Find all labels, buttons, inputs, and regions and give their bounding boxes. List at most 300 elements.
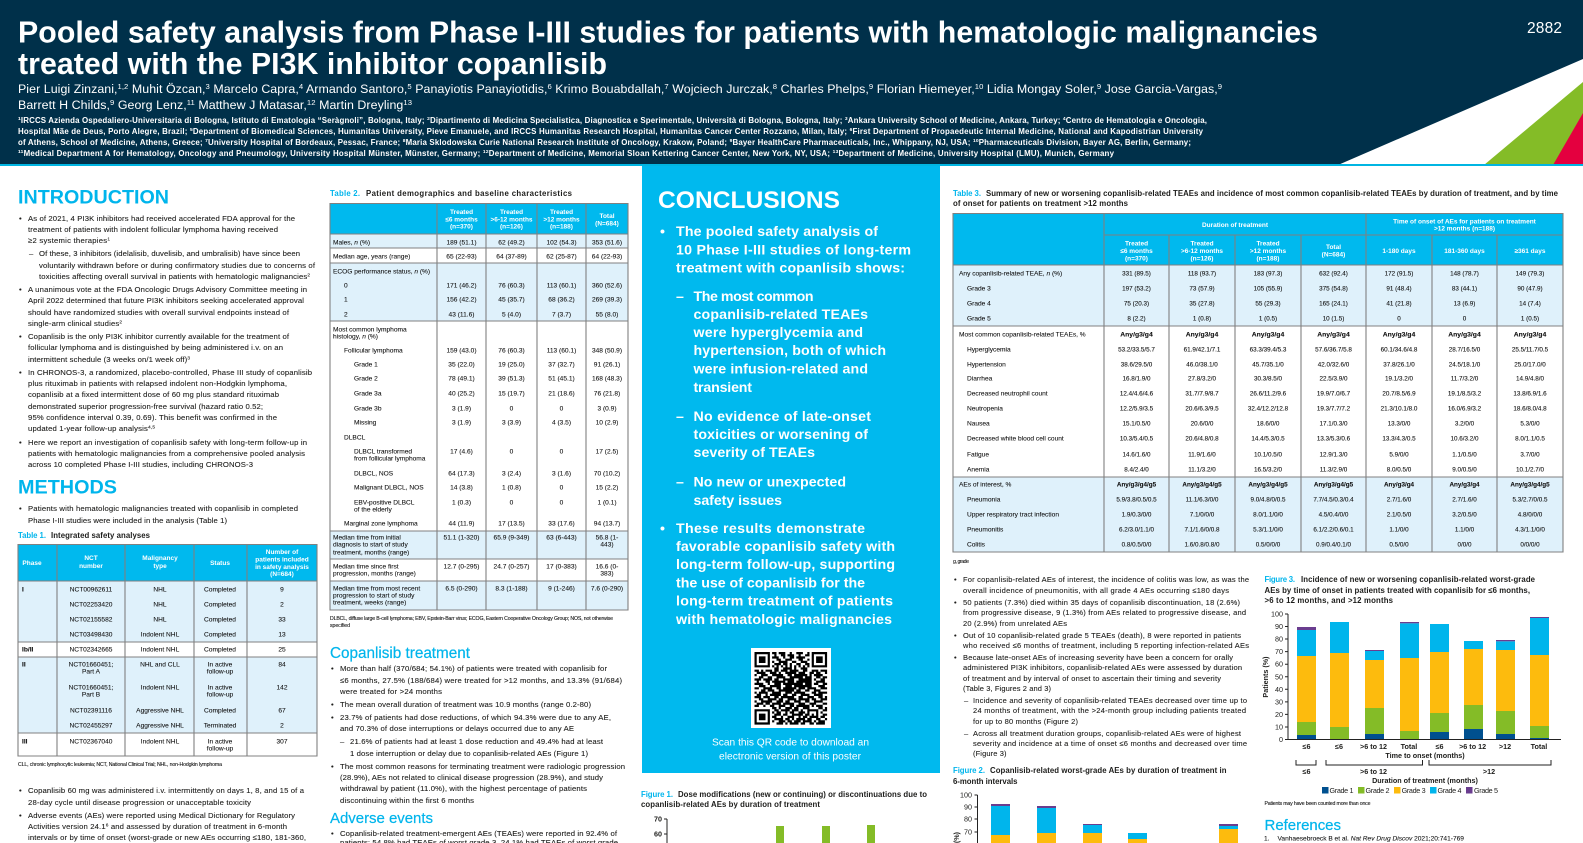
table 2 values: 62 (49.2) xyxy=(498,239,525,246)
affiliations: 11 xyxy=(18,149,24,155)
figure 3 caption xyxy=(1264,575,1536,605)
table 3 footnote: g, grade xyxy=(953,559,969,565)
table 1 body: NHL and CLL xyxy=(140,662,180,668)
x axis labels: time to onset: >12 xyxy=(1499,742,1511,751)
text: methods bullets: and assessed by duration of treatment in 6-month xyxy=(109,822,287,831)
text: QR caption: electronic version of this poster xyxy=(719,752,862,762)
y axis: 30 xyxy=(1275,697,1283,706)
table 3 values: 13.3/0/0 xyxy=(1388,420,1411,427)
table 1 body: follow-up xyxy=(207,668,234,676)
table 3 values xyxy=(1116,270,1550,548)
text: results bullets under table 3: (Figure 3) xyxy=(973,749,1007,758)
figure 2 caption: Copanlisib-related worst-grade AEs by duration of treatment in xyxy=(990,766,1227,775)
heading: references: References xyxy=(1264,817,1341,834)
table 3 header: (n=188) xyxy=(1257,256,1279,262)
table 2 values: 189 (51.1) xyxy=(446,239,477,246)
authors: Armando Santoro, xyxy=(303,82,407,96)
legend: Grade 5 xyxy=(1474,786,1498,795)
text: introduction bullets: April 2022 determined that future PI3K inhibitors seeking accelerated approval xyxy=(28,296,304,305)
table 2 values: 68 (36.2) xyxy=(548,296,575,303)
table 2 row labels: Missing xyxy=(354,419,377,426)
legend: Grade 2 xyxy=(1366,786,1390,795)
affiliations: Dipartimento di Medicina Specialistica, Diagnostica e Sperimentale, Università di Bologna, Bologna, Italy; xyxy=(430,116,845,125)
table 3 values: 10.1/0.5/0 xyxy=(1254,451,1283,458)
table 1 body: follow-up xyxy=(207,746,234,752)
text: introduction bullets: treatment of patients with indolent follicular lymphoma having received xyxy=(28,225,278,234)
table 1 body: Part A xyxy=(82,668,101,676)
authors: 9 xyxy=(1218,82,1222,91)
table 2 values: 360 (52.6) xyxy=(592,282,622,289)
table 2 values: 64 (37-89) xyxy=(496,253,527,260)
table 3 values: 1.6/0.8/0.8/0 xyxy=(1184,541,1220,548)
table 3 values: 3.2/0/0 xyxy=(1455,420,1475,427)
table 3 row labels: Any copanlisib-related TEAE, n (%) xyxy=(959,270,1062,277)
table 3 values: 7.1/1.6/0/0.8 xyxy=(1184,526,1220,533)
header band xyxy=(0,0,1583,166)
table 2 values: 56.8 (1- xyxy=(596,534,618,541)
text: results bullets under table 3: Incidence and severity of copanlisib-related TEAEs decreased over time up to xyxy=(973,696,1247,705)
table 2 values: 70 (10.2) xyxy=(594,470,620,477)
table 3 values: Any/g3/g4/g5 xyxy=(1117,481,1157,488)
affiliations: Department of Medicine, University Hospital (LMU), Munich, Germany xyxy=(839,149,1115,158)
table 3 values: 25.5/11.7/0.5 xyxy=(1512,346,1549,353)
table 3 values: 28.7/16.5/0 xyxy=(1449,346,1481,353)
table 3 values: 16.8/1.9/0 xyxy=(1122,375,1151,382)
table 3 values: 9.0/0.5/0 xyxy=(1452,466,1477,473)
table 3 values: 14.4/5.3/0.5 xyxy=(1251,435,1285,442)
table 1 caption: Table 1. xyxy=(18,531,46,540)
table 2 row labels: from follicular lymphoma xyxy=(354,455,426,462)
table 2 row labels: Median age, years (range) xyxy=(333,253,410,260)
table 1 body: 33 xyxy=(278,616,286,624)
table 1 body: In active xyxy=(208,662,233,668)
bar: treated 2 xyxy=(1037,806,1056,843)
table 2 header xyxy=(445,209,619,230)
text: conclusions bullets: the use of copanlisib for the xyxy=(676,576,865,592)
text: conclusions bullets: – xyxy=(676,409,684,425)
authors: 11 xyxy=(187,98,195,107)
figure 2 chart: 80 xyxy=(964,814,972,824)
legend: Grade 1 xyxy=(1330,786,1354,795)
table 2 values: 269 (39.3) xyxy=(592,296,622,303)
text: treatment bullets: were treated for >24 months xyxy=(339,687,442,696)
table 3 row labels: Decreased neutrophil count xyxy=(967,390,1048,397)
table 1 header: Number of xyxy=(266,549,299,556)
figure 1 caption xyxy=(641,790,927,809)
table 3 values: Any/g3/g4 xyxy=(1317,331,1350,338)
authors: 13 xyxy=(403,98,412,107)
table 2 row labels: Marginal zone lymphoma xyxy=(344,520,418,527)
table 1 header: number xyxy=(79,563,103,570)
table 1 header: patients included xyxy=(255,556,309,564)
table 3 values: 14.9/4.8/0 xyxy=(1516,375,1545,382)
x axis labels: time to onset xyxy=(1303,742,1547,760)
x axis labels: time to onset: ≤6 xyxy=(1436,742,1444,751)
figure 2 chart: 90 xyxy=(964,802,972,812)
table 3 values: 11.1/6.3/0/0 xyxy=(1186,496,1219,503)
table 3 header: >12 months xyxy=(1250,248,1287,255)
text: results bullets under table 3: administered PI3K inhibitors, copanlisib-related AEs were assessed by duration xyxy=(963,663,1242,672)
affiliations: Department of Biomedical Sciences, Humanitas University, Pieve Emanuele, and IRCCS Humanitas Research Hospital, Humanitas Cancer Center Rozzano, Milan, Italy; xyxy=(193,127,849,136)
text: results bullets under table 3: • xyxy=(954,598,957,607)
text: introduction bullets: • xyxy=(19,332,22,341)
table 3 values: 0.5/0/0/0 xyxy=(1256,541,1281,548)
table 3 header: >12 months (n=188) xyxy=(1434,226,1495,232)
text: adverse events bullets xyxy=(331,829,618,843)
table 1 body: 2 xyxy=(280,602,284,608)
table 3 values: 37.8/26.1/0 xyxy=(1383,361,1415,368)
table 2 block xyxy=(330,189,628,629)
table 3 row labels: Pneumonia xyxy=(967,496,1001,503)
text: introduction bullets: plus rituximab in patients with relapsed indolent non-Hodgkin lymphoma, xyxy=(28,379,287,388)
section: methods xyxy=(18,476,317,842)
text: conclusions bullets: long-term treatment of patients xyxy=(676,594,893,610)
table 3 values: 73 (57.9) xyxy=(1189,285,1215,292)
text: treatment bullets xyxy=(331,664,625,805)
table 2 values: 17 (0-383) xyxy=(546,563,577,570)
table 2 values: 78 (49.1) xyxy=(448,375,475,382)
table 3 row labels: Diarrhea xyxy=(967,375,993,382)
text: QR caption: Scan this QR code to download an xyxy=(712,738,869,748)
table 3 values: 7.7/4.5/0.3/0.4 xyxy=(1313,496,1354,503)
y axis: Patients (%) xyxy=(1261,656,1270,698)
table 2 values: 5 (4.0) xyxy=(502,311,521,318)
table 2 row labels: Grade 3b xyxy=(354,405,382,412)
table 2 header: (n=188) xyxy=(550,224,573,230)
table 3 header: 181-360 days xyxy=(1444,248,1485,255)
table 2 values: 17 (13.5) xyxy=(498,520,525,527)
text: introduction bullets: • xyxy=(19,214,22,223)
table 1 body: NCT02391116 xyxy=(70,708,112,714)
text: methods bullets: 28-day cycle until disease progression or unacceptable toxicity xyxy=(28,798,251,807)
text: treatment bullets: 21.6% of patients had at least 1 dose reduction and 49.4% had at least xyxy=(350,737,604,746)
table 3 values: 53.2/33.5/5.7 xyxy=(1118,346,1155,353)
table 2 values: 17 (4.6) xyxy=(450,448,473,455)
text: results bullets under table 3: overall incidence of pneumonitis, with all grade 4 AEs occurring ≤180 days xyxy=(963,586,1229,595)
table 1 body: 13 xyxy=(278,632,286,638)
table 3 values: 0/0/0/0 xyxy=(1520,541,1540,548)
table 1 body: NCT02342665 xyxy=(70,646,113,654)
text: treatment bullets: ≤6 months, 27.5% (188/684) were treated for >12 months, and 13.3% (91/684) xyxy=(340,676,622,685)
table 2 values: 12.7 (0-295) xyxy=(444,563,479,570)
table 3 row labels: Grade 5 xyxy=(967,315,991,322)
table 1 body xyxy=(69,586,288,752)
table 2 values: 168 (48.3) xyxy=(592,375,622,382)
text: methods bullets: • xyxy=(19,786,22,795)
figure 3 caption: >6 to 12 months, and >12 months xyxy=(1264,596,1394,605)
table 3 values: 12.2/5.9/3.5 xyxy=(1120,405,1154,412)
table 1 body: 2 xyxy=(280,722,284,730)
affiliations: Medical Department A for Hematology, Oncology and Pneumology, University Hospital Münster, Münster, Germany; xyxy=(24,149,483,158)
table 2 header: >12 months xyxy=(543,216,580,224)
table 3 values: 57.6/36.7/5.8 xyxy=(1315,346,1352,353)
table 3 values: 183 (97.3) xyxy=(1254,270,1282,277)
authors: 3 xyxy=(206,82,210,91)
table 3 row labels: Decreased white blood cell count xyxy=(967,435,1064,442)
table 3 values: 19.1/8.5/3.2 xyxy=(1448,390,1482,397)
text: introduction bullets: 3 xyxy=(187,356,190,362)
figure 1 chart: 70 xyxy=(654,814,662,824)
table 3 values: 19.9/7.0/6.7 xyxy=(1317,390,1351,397)
text: treatment bullets: The most common reasons for terminating treatment were radiologic progression xyxy=(340,762,625,771)
authors: 4 xyxy=(299,82,304,91)
heading: adverse events: Adverse events xyxy=(330,810,433,827)
table 2 values: 15 (2.2) xyxy=(596,484,618,491)
authors: Marcelo Capra, xyxy=(210,82,299,96)
table 1 body: Completed xyxy=(204,632,236,638)
table 3 header: Time of onset of AEs for patients on treatment xyxy=(1393,218,1537,226)
text: results bullets under table 3: 24 months of treatment, with the >24-month group including patients treated xyxy=(973,706,1246,715)
table 3 values: 2.7/1.6/0 xyxy=(1452,496,1477,503)
text: treatment bullets: discontinuing within the first 6 months xyxy=(340,796,474,805)
authors: 9 xyxy=(869,82,873,91)
table 2 values: 7.6 (0-290) xyxy=(591,585,623,592)
bar: 6 xyxy=(1464,641,1483,740)
table 3 values: 20.6/4.8/0.8 xyxy=(1185,435,1219,442)
table 2 row labels: Most common lymphoma xyxy=(333,326,407,333)
table 2 row labels: Median time since first xyxy=(333,563,399,570)
affiliations: IRCCS Azienda Ospedaliero-Universitaria di Bologna, Istituto di Ematologia “Seràgnoli”, Bologna, Italy; xyxy=(21,116,427,125)
affiliations: Hospital Mãe de Deus, Porto Alegre, Brazil; xyxy=(18,127,187,136)
table 2 row labels: treatment, weeks (range) xyxy=(333,599,406,606)
affiliations: Bayer HealthCare Pharmaceuticals, Inc., Whippany, NJ, USA; xyxy=(732,138,973,147)
table 3 values: 10.1/2.7/0 xyxy=(1516,466,1545,473)
table 2 values: 159 (43.0) xyxy=(446,347,477,354)
table 2 row labels: Grade 3a xyxy=(354,390,382,397)
table 3 values: 14 (7.4) xyxy=(1519,300,1541,307)
table 2 values: 33 (17.6) xyxy=(548,520,575,527)
table 3 values: 105 (55.9) xyxy=(1254,285,1282,292)
table 2 values: 10 (2.9) xyxy=(596,419,618,426)
table 3 row labels: AEs of interest, % xyxy=(959,481,1012,488)
table 3 values: 10.6/3.2/0 xyxy=(1450,435,1479,442)
table 3 values: 0.9/0.4/0.1/0 xyxy=(1316,541,1352,548)
authors: Barrett H Childs, xyxy=(18,98,110,112)
affiliations: 9 xyxy=(730,138,733,144)
table 3 values: 20.6/0/0 xyxy=(1191,420,1214,427)
table 3 values: 55 (29.3) xyxy=(1255,300,1281,307)
table 2 row labels: DLBCL xyxy=(344,434,366,441)
text: introduction bullets: 4,5 xyxy=(148,424,155,430)
table 2 header: Treated xyxy=(550,209,573,216)
authors: Martin Dreyling xyxy=(316,98,403,112)
text: introduction bullets: Copanlisib is the only PI3K inhibitor currently available for the treatment of xyxy=(28,332,290,341)
table 3 values: 60.1/34.6/4.8 xyxy=(1381,346,1418,353)
table 3 values: 331 (89.5) xyxy=(1122,270,1151,277)
table 3 values: 75 (20.3) xyxy=(1124,300,1149,307)
affiliations: 3 xyxy=(845,116,848,122)
affiliations: 2 xyxy=(427,116,430,122)
table 3 values: 9.0/4.8/0/0.5 xyxy=(1250,496,1286,503)
text: introduction bullets: follicular lymphoma and is distinguished by being administered i.v. on an xyxy=(28,343,283,352)
table 1 header: (N=684) xyxy=(270,571,294,578)
text: results bullets under table 3: – xyxy=(964,696,969,705)
table 2 caption: Patient demographics and baseline characteristics xyxy=(366,189,573,198)
text: results bullets under table 3: For copanlisib-related AEs of interest, the incidence of colitis was low, as was the xyxy=(963,575,1249,584)
table 2 row labels: Grade 1 xyxy=(354,361,378,368)
table 2 values: 65.9 (9-349) xyxy=(494,534,529,541)
table 3 values: 11.1/3.2/0 xyxy=(1188,466,1216,473)
table 3 values: 63.3/39.4/5.3 xyxy=(1250,346,1287,353)
table 3 values: 18.6/0/0 xyxy=(1257,420,1280,427)
text: introduction bullets: single-arm clinical studies xyxy=(28,319,119,328)
table 2 values: 40 (25.2) xyxy=(448,390,475,397)
text: conclusions bullets: No new or unexpected xyxy=(694,474,846,490)
table 1 footnote: CLL, chronic lymphocytic leukemia; NCT, National Clinical Trial; NHL, non-Hodgkin lymphoma xyxy=(18,762,222,768)
authors xyxy=(18,82,1222,112)
figure 1 caption: Dose modifications (new or continuing) or discontinuations due to xyxy=(678,790,927,799)
title xyxy=(18,16,1318,81)
table 3 values: 11.7/3.2/0 xyxy=(1451,375,1479,382)
table 2 values xyxy=(444,239,623,592)
table 1 header: Malignancy xyxy=(142,555,178,562)
table 3 values: 32.4/12.2/12.8 xyxy=(1248,405,1289,412)
table 3 row labels: Neutropenia xyxy=(967,405,1003,412)
table 1 body: Indolent NHL xyxy=(141,632,180,638)
table 2 values: 51 (45.1) xyxy=(548,375,575,382)
table 2 row labels: 0 xyxy=(344,282,348,289)
table 3 values: 1 (0.5) xyxy=(1259,315,1277,322)
table 3 values: Any/g3/g4 xyxy=(1384,481,1415,488)
table 3 values: 10.3/5.4/0.5 xyxy=(1120,435,1154,442)
table 2 row labels: progression to start of study xyxy=(333,592,415,599)
table 2 values: 3 (1.6) xyxy=(552,470,571,477)
table 1 body: In active xyxy=(208,738,233,746)
table 3 values: 90 (47.9) xyxy=(1517,285,1543,292)
table 3 values: 13 (6.9) xyxy=(1454,300,1475,307)
table 2 values: 37 (32.7) xyxy=(548,361,575,368)
table 3 values: 0.5/0/0 xyxy=(1389,541,1409,548)
figure 1 chart: 60 xyxy=(654,830,662,838)
table 3 row labels: Fatigue xyxy=(967,451,989,458)
table 1 body: Indolent NHL xyxy=(141,684,180,692)
table 3 values: 45.7/35.1/0 xyxy=(1252,361,1284,368)
text: treatment bullets: – xyxy=(340,737,345,746)
table 1 body: NHL xyxy=(153,586,167,594)
y axis: 90 xyxy=(1275,622,1283,631)
figure 3 caption: AEs by time of onset in patients treated with copanlisib for ≤6 months, xyxy=(1264,586,1530,595)
table 2 values: 64 (17.3) xyxy=(448,470,475,477)
x axis labels: time to onset: >6 to 12 xyxy=(1360,742,1387,751)
text: results bullets under table 3: – xyxy=(964,729,969,738)
table 2 values: 62 (25-87) xyxy=(546,253,577,260)
text: introduction bullets: As of 2021, 4 PI3K inhibitors had received accelerated FDA approval for the xyxy=(28,214,295,223)
table 2 values: 3 (1.9) xyxy=(452,405,471,412)
table 3 values: Any/g3/g4 xyxy=(1383,331,1415,338)
authors: Krimo Bouabdallah, xyxy=(552,82,664,96)
table 3 values: 5.9/3.8/0.5/0.5 xyxy=(1116,496,1157,503)
table 3 values: 197 (53.2) xyxy=(1122,285,1151,292)
authors: Wojciech Jurczak, xyxy=(669,82,773,96)
table 3 values: 2.7/1.6/0 xyxy=(1387,496,1412,503)
text: conclusions bullets: hypertension, both of which xyxy=(694,343,886,359)
table 2 values: 65 (22-93) xyxy=(446,253,477,260)
table 2 header: (N=684) xyxy=(595,220,619,228)
text: conclusions bullets: severity of TEAEs xyxy=(694,445,815,461)
table 3 header: Treated xyxy=(1125,240,1148,248)
table 3 values: 16.5/3.2/0 xyxy=(1254,466,1283,473)
table 3 header: (n=126) xyxy=(1191,256,1213,262)
heading: introduction: INTRODUCTION xyxy=(18,186,169,208)
table 1 body: Part B xyxy=(82,692,101,698)
table 3 values: 17.1/0.3/0 xyxy=(1319,420,1348,427)
y axis xyxy=(1261,610,1288,744)
text: introduction bullets: Of these, 3 inhibitors (idelalisib, duvelisib, and umbralisib) have since been xyxy=(39,249,300,258)
heading: conclusions: CONCLUSIONS xyxy=(658,187,840,214)
authors: 9 xyxy=(110,98,114,107)
table 1 header: Phase xyxy=(22,560,42,567)
section: references xyxy=(1264,817,1464,842)
text: methods bullets xyxy=(19,786,306,842)
authors: Matthew J Matasar, xyxy=(195,98,307,112)
table 3 header: ≥361 days xyxy=(1514,248,1546,255)
x axis labels: time to onset: Time to onset (months) xyxy=(1385,751,1465,760)
text: conclusions bullets: • xyxy=(660,224,665,240)
authors: Lidia Mongay Soler, xyxy=(983,82,1097,96)
table 3 values: 8.0/1.1/0/0 xyxy=(1253,511,1283,518)
text: conclusions bullets: These results demonstrate xyxy=(676,521,865,537)
text: treatment bullets: (28.9%), AEs not related to clinical disease progression (28.9%), and study xyxy=(340,773,603,782)
panel: conclusions xyxy=(642,166,940,773)
table 2 values: 156 (42.2) xyxy=(446,296,477,303)
table 2 values: 443) xyxy=(600,541,614,548)
y axis: 10 xyxy=(1275,722,1283,732)
table 3 values: 22.5/3.9/0 xyxy=(1319,375,1348,382)
table 2 values: 94 (13.7) xyxy=(594,520,620,527)
table 3 values: 4.5/0.4/0/0 xyxy=(1319,511,1349,518)
y axis: 20 xyxy=(1275,710,1283,719)
text: results bullets under table 3 xyxy=(954,575,1249,758)
text: methods intro: • xyxy=(19,504,22,513)
table 3 values: 0 xyxy=(1463,315,1467,322)
table 3 values: Any/g3/g4 xyxy=(1448,331,1481,338)
affiliations: 8 xyxy=(403,138,406,144)
text: treatment bullets: More than half (370/684; 54.1%) of patients were treated with copanlisib for xyxy=(340,664,607,673)
table 1 body: 25 xyxy=(278,646,286,654)
table 2 values: 1 (0.1) xyxy=(597,499,617,506)
text: results bullets under table 3: • xyxy=(954,653,957,662)
table 2 values: 24.7 (0-257) xyxy=(494,563,529,570)
bar: treated 6 xyxy=(1219,824,1238,843)
table 3 row labels: Grade 4 xyxy=(967,300,991,307)
table 2 values: 0 xyxy=(560,448,564,455)
table 1 body: Aggressive NHL xyxy=(136,708,184,714)
table 3 values: 13.3/5.3/0.6 xyxy=(1317,435,1351,442)
table 3 header: (N=684) xyxy=(1322,252,1345,258)
affiliations: 7 xyxy=(205,138,208,144)
authors: Florian Hiemeyer, xyxy=(873,82,975,96)
table 3 header: 1-180 days xyxy=(1382,248,1416,255)
figure 1 chart xyxy=(654,814,875,843)
table 1 body: NCT01660451; xyxy=(69,662,114,668)
table 3 values: 0/0/0 xyxy=(1457,541,1472,548)
table 2 values: 1 (0.3) xyxy=(452,499,471,506)
table 3 row labels: Upper respiratory tract infection xyxy=(967,511,1059,518)
text: methods bullets: 6 xyxy=(106,822,109,828)
table 1 body: Indolent NHL xyxy=(141,646,180,654)
table 3 row labels: Pneumonitis xyxy=(967,526,1004,533)
authors: Charles Phelps, xyxy=(777,82,869,96)
text: conclusions bullets: favorable copanlisib safety with xyxy=(676,539,895,555)
table 1 body: NHL xyxy=(153,602,167,608)
text: methods intro: Patients with hematologic malignancies treated with copanlisib in completed xyxy=(28,504,298,513)
table 2 row labels: treatment, months (range) xyxy=(333,549,409,556)
table 1 body: 84 xyxy=(278,662,286,668)
table 3 values: 31.7/7.9/8.7 xyxy=(1185,390,1219,397)
table 3 values: 11.3/2.9/0 xyxy=(1320,466,1348,473)
table 3 values: 8.0/0.5/0 xyxy=(1387,466,1412,473)
authors: 7 xyxy=(664,82,669,91)
